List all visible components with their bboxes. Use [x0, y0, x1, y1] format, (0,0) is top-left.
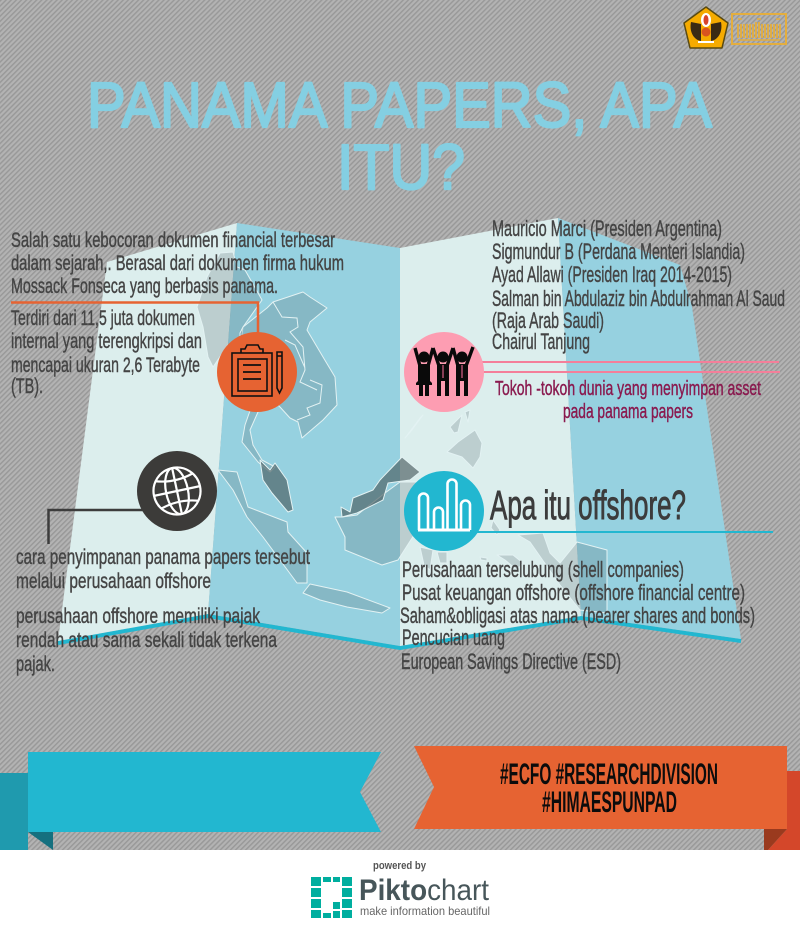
text block: offshore tax: perusahaan offshore memiliki pajak: [16, 605, 260, 628]
land: small islands A: [420, 547, 433, 570]
text block: offshore list: Pencucian uang: [402, 625, 505, 650]
land: Philippine islands: [450, 415, 462, 433]
land: small islands D: [480, 557, 487, 561]
folded map: [58, 218, 741, 648]
text block: document size: (TB).: [11, 375, 43, 398]
text block: offshore tax: [16, 605, 277, 676]
icon: globe: [137, 451, 217, 531]
text block: world figures: (Raja Arab Saudi): [492, 308, 604, 333]
logo: university shield: [684, 7, 728, 48]
map panel 3: [400, 218, 581, 646]
text block: definition: [11, 229, 344, 298]
text block: offshore tax: pajak.: [16, 653, 55, 676]
ribbon: cyan: [0, 752, 381, 850]
land: Palawan: [405, 415, 423, 438]
text block: document size: [11, 307, 202, 398]
land: Java: [303, 584, 390, 613]
text block: offshore list: European Savings Directive (ESD): [401, 649, 621, 674]
title: [87, 69, 712, 203]
logo: gold emblem: [732, 14, 786, 44]
text block: world figures: [492, 216, 785, 354]
land: small islands C: [497, 555, 523, 570]
text block: offshore tax: rendah atau sama sekali tidak terkena: [16, 629, 277, 652]
title: ITU?: [337, 131, 465, 203]
land: Thai peninsula: [242, 405, 275, 472]
text block: definition: Salah satu kebocoran dokumen financial terbesar: [11, 229, 335, 252]
text block: offshore list: [400, 557, 755, 674]
land: small islands E: [491, 520, 500, 535]
connector: orange line: [11, 302, 258, 334]
land: Indochina: [240, 292, 337, 438]
text block: storage method: cara penyimpanan panama papers tersebut: [16, 546, 310, 569]
ribbon: orange with hashtags: [414, 746, 800, 850]
caption: world figures: pada panama papers: [563, 401, 693, 423]
text block: storage method: melalui perusahaan offshore: [16, 570, 211, 593]
land: Kalimantan: [335, 482, 430, 565]
map panel 4: [558, 218, 741, 639]
land: Malay peninsula: [260, 460, 293, 512]
land: Indochina borders: [273, 302, 322, 420]
footer: tagline: make information beautiful: [360, 904, 490, 918]
icon: clipboard and pencil: [217, 332, 297, 412]
icon: bar chart: [404, 471, 484, 551]
text block: world figures: Chairul Tanjung: [492, 329, 590, 354]
text block: document size: mencapai ukuran 2,6 Terabyte: [11, 354, 200, 377]
land: small island: [465, 410, 470, 422]
map bottom edge: [58, 616, 741, 648]
white footer background: [0, 850, 800, 930]
text block: document size: internal yang terengkripsi dan: [11, 330, 202, 353]
land: Sarawak: [341, 457, 420, 517]
ribbon: orange with hashtags: #HIMAESPUNPAD: [542, 786, 677, 819]
text block: definition: dalam sejarah,. Berasal dari dokumen firma hukum: [11, 252, 344, 275]
land: Sulawesi: [518, 533, 607, 613]
connector: pink lines: [480, 362, 780, 372]
footer: powered by: powered by: [373, 860, 427, 872]
icon: three people with raised hands: [404, 332, 484, 412]
map panel 2: [208, 223, 400, 646]
title: PANAMA PAPERS, APA: [87, 69, 712, 141]
connector: cyan line: [475, 531, 773, 533]
land: Myanmar: [197, 252, 262, 367]
text block: document size: Terdiri dari 11,5 juta dokumen: [11, 307, 195, 330]
text block: definition: Mossack Fonseca yang berbasis panama.: [11, 275, 278, 298]
footer: Piktochart wordmark: Piktochart: [359, 874, 490, 907]
heading: what is offshore: Apa itu offshore?: [490, 482, 686, 528]
map panel 1: [58, 223, 237, 641]
land: Philippines: [447, 430, 482, 468]
connector: dark line: [48, 510, 145, 544]
footer: Piktochart logo icon: [311, 877, 352, 918]
land: small islands B: [437, 552, 447, 563]
caption: world figures: [495, 378, 761, 423]
land: Sumatra: [218, 470, 307, 583]
text block: storage method: [16, 546, 310, 593]
